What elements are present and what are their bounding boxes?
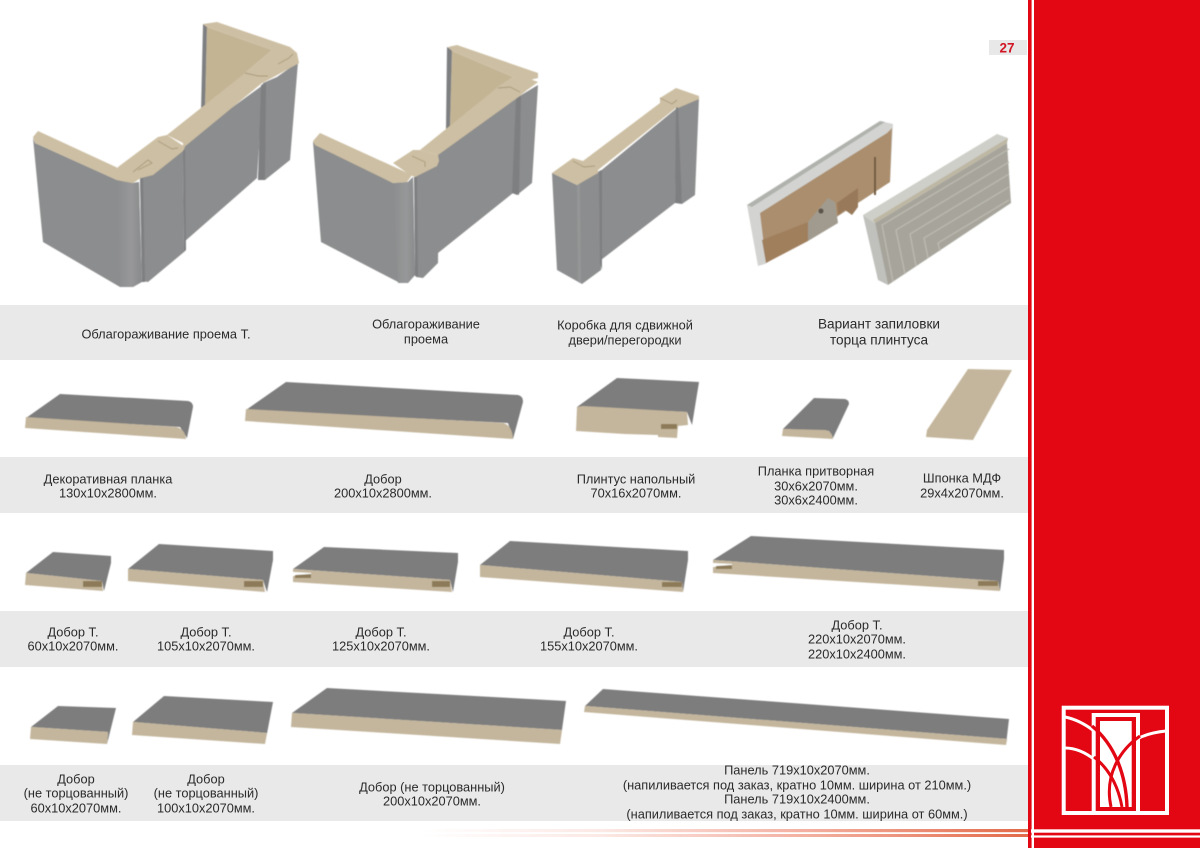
bottom fading stripes [420,829,1028,837]
row 4 captions: (напиливается под заказ, кратно 10мм. ширина от 210мм.) [623,778,971,792]
row 4 captions: 200x10x2070мм. [383,794,481,808]
row 3 captions: Добор Т. [180,624,232,640]
row 3 captions: Добор Т. [564,624,614,640]
row 2 captions: 30x6x2070мм. [774,478,858,494]
row 2 captions: Шпонка МДФ [923,470,1001,486]
row 3 captions [28,618,906,662]
row 4 captions: (напиливается под заказ, кратно 10мм. ширина от 60мм.) [626,806,968,822]
row 2 captions: Планка притворная [758,464,874,478]
row 3 captions: 220x10x2400мм. [808,646,906,662]
dobor 200 untrimmed [291,688,566,744]
row 3 captions: 105x10x2070мм. [157,638,255,654]
illustration: plinth end cut variant [747,121,1011,285]
plinth end piece [863,134,1011,285]
dobor 60 untrimmed [30,706,116,744]
row 2 captions: Добор [364,472,402,486]
row 4 captions: Добор (не торцованный) [359,780,505,794]
row 2 captions: Плинтус напольный [577,472,695,486]
row 1 captions: двери/перегородки [568,332,682,348]
front walls [33,138,142,287]
row 3 profiles [25,536,1004,592]
row 4 captions: (не торцованный) [24,786,128,800]
row 3 captions: 125x10x2070мм. [332,638,430,654]
row 2 captions: 130x10x2800мм. [59,486,157,500]
row 1 captions: торца плинтуса [830,332,928,348]
row 4 profiles [30,688,1009,745]
dobor 200 [245,382,523,439]
row 2 captions: Декоративная планка [44,472,173,486]
row 4 captions: (не торцованный) [154,786,258,800]
closing strip [782,398,849,439]
row 2 captions: 200x10x2800мм. [334,486,432,500]
illustration: sliding door frame [552,88,699,284]
gray caption bands [0,305,1028,821]
row 2 captions [44,464,1004,508]
dobor T 125 [293,547,458,592]
row 4 captions: Добор [187,772,225,786]
dobor 100 untrimmed [132,696,273,744]
rear interior [450,51,513,128]
MDF key [926,369,1012,440]
beige top surfaces [498,77,538,98]
row 3 captions: Добор Т. [832,618,882,632]
row 4 captions: Добор [57,772,95,786]
row 2 captions: 30x6x2400мм. [774,492,858,508]
row 1 captions: проема [404,332,449,346]
row 4 captions: 60x10x2070мм. [31,800,121,816]
page number tag [989,40,1027,56]
row 3 captions: Добор Т. [48,624,98,640]
plinth piece with clip [747,121,893,266]
row 4 captions: Панель 719x10x2400мм. [724,792,870,806]
page number tag: 27 [999,40,1015,56]
front walls [313,142,415,283]
row 2 captions: 70x16x2070мм. [591,486,681,500]
row 1 captions: Облагораживание [372,316,480,332]
red side panel [1028,0,1200,848]
row 1 captions [81,316,940,348]
row 3 captions: 220x10x2070мм. [808,632,906,646]
decorative strip [25,394,193,439]
row 1 captions: Коробка для сдвижной [557,318,693,332]
illustration: door opening trim [313,45,538,283]
row 4 captions: 100x10x2070мм. [157,800,255,816]
row 2 profiles [25,369,1012,440]
illustration: door opening trim T [33,22,299,287]
row 2 captions: 29x4x2070мм. [920,486,1004,500]
row 3 captions: Добор Т. [356,624,406,640]
row 3 captions: 60x10x2070мм. [28,638,118,654]
dobor T 105 [128,544,273,592]
dobor T 155 [480,541,688,592]
dobor T 220 [713,536,1004,591]
rear interior [205,27,272,110]
beige top surfaces [245,50,299,83]
row 4 captions [24,762,971,822]
row 1 captions: Вариант запиловки [818,316,940,332]
row 4 captions: Панель 719x10x2070мм. [724,762,870,778]
dobor T 60 [25,552,111,591]
logo [1064,708,1167,813]
row 1 captions: Облагораживание проема Т. [81,326,251,342]
floor plinth [576,378,699,438]
panel 719 [584,689,1009,745]
row 3 captions: 155x10x2070мм. [540,638,638,654]
